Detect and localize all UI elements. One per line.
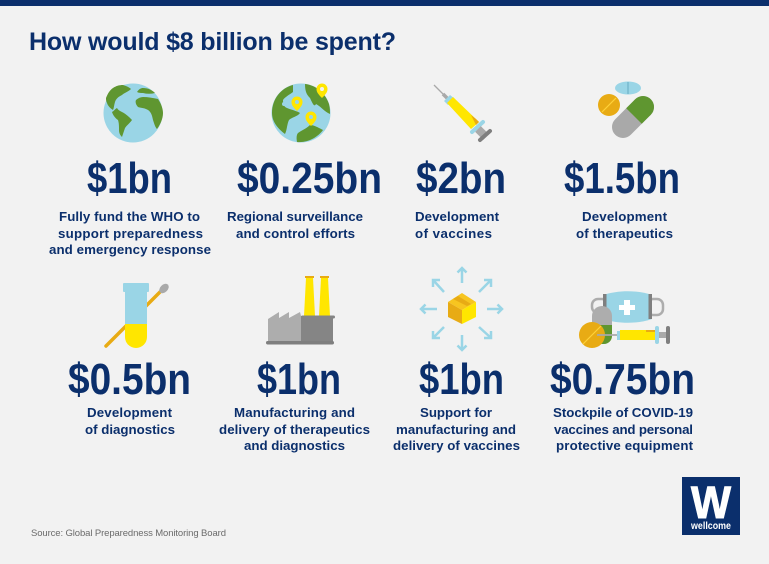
source note: Source: Global Preparedness Monitoring Board	[31, 528, 226, 539]
icon: pills	[598, 82, 654, 127]
panel: diagnostics	[68, 282, 191, 437]
icon: syringe	[434, 85, 490, 140]
title: How would $8 billion be spent?	[29, 28, 396, 56]
description: Fully fund the WHO to	[59, 209, 200, 224]
amount: $1bn	[87, 154, 172, 203]
description: Development	[415, 209, 500, 224]
description	[393, 405, 520, 453]
description: Support for	[420, 405, 492, 420]
description: and emergency response	[49, 242, 211, 257]
description: delivery of therapeutics	[219, 422, 370, 437]
description: of diagnostics	[85, 422, 175, 437]
icon: factory	[266, 276, 335, 344]
panel: stockpile	[550, 291, 695, 453]
description	[85, 405, 175, 437]
description	[553, 405, 694, 453]
amount: $1bn	[419, 355, 504, 404]
logo: wellcome: W	[691, 477, 731, 528]
description: Development	[582, 209, 668, 224]
amount: $0.5bn	[68, 355, 191, 404]
description	[219, 405, 370, 453]
description: Stockpile of COVID-19	[553, 405, 693, 420]
panel: vaccine delivery	[393, 268, 520, 453]
description: vaccines and personal	[554, 422, 693, 437]
top bar	[0, 0, 769, 6]
icon: box with arrows	[421, 268, 502, 350]
icon: test tube and swab	[106, 282, 171, 348]
description: manufacturing and	[396, 422, 516, 437]
description	[576, 209, 673, 241]
panel: regional surveillance	[227, 84, 382, 241]
description	[49, 209, 211, 257]
logo: wellcome	[682, 477, 740, 535]
amount: $0.75bn	[550, 355, 695, 404]
icon: globe	[104, 84, 163, 142]
amount: $1bn	[257, 355, 341, 404]
description: and diagnostics	[244, 438, 345, 453]
description: support preparedness	[58, 226, 203, 241]
logo: wellcome: wellcome	[690, 521, 731, 532]
amount: $1.5bn	[564, 154, 680, 203]
amount: $2bn	[416, 154, 506, 203]
description: Regional surveillance	[227, 209, 363, 224]
description: protective equipment	[556, 438, 694, 453]
icon: mask, pills and syringe	[579, 291, 670, 348]
panel: therapeutics	[564, 82, 680, 241]
panel: WHO funding	[49, 84, 211, 257]
description: of vaccines	[415, 226, 492, 241]
amount: $0.25bn	[237, 154, 382, 203]
icon: globe with location pins	[272, 84, 330, 142]
description: of therapeutics	[576, 226, 673, 241]
description: Development	[87, 405, 173, 420]
description: delivery of vaccines	[393, 438, 520, 453]
description: Manufacturing and	[234, 405, 355, 420]
panel: manufacturing therapeutics	[219, 276, 370, 453]
description: and control efforts	[236, 226, 355, 241]
description	[227, 209, 363, 241]
panel: vaccines	[415, 85, 506, 241]
description	[415, 209, 500, 241]
